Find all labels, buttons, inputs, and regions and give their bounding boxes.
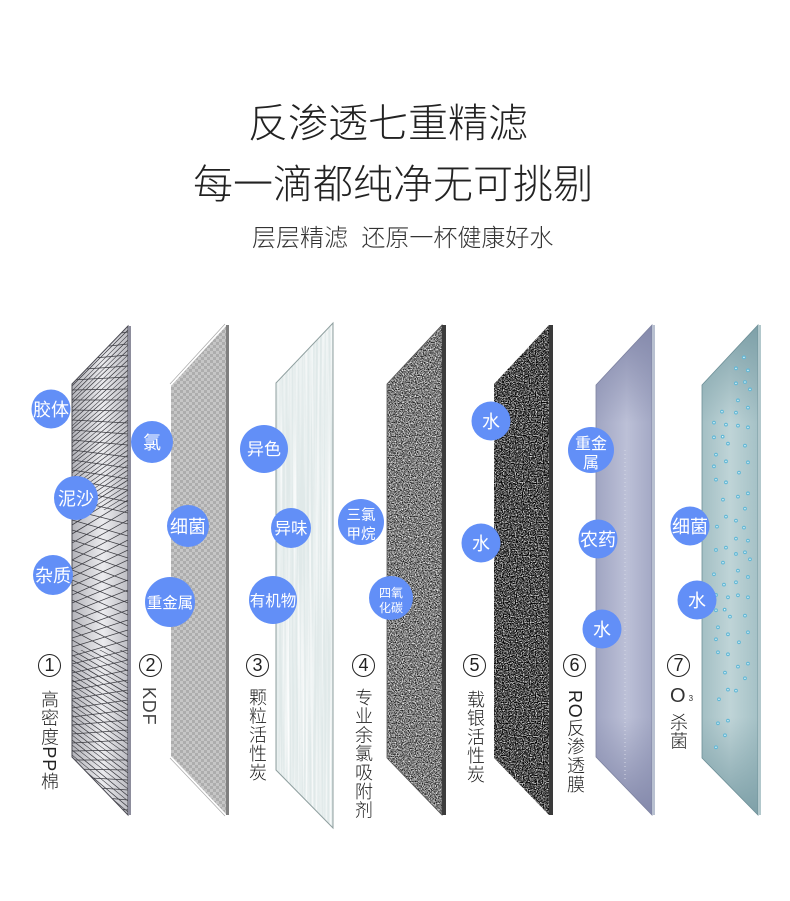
- bubble: 细菌: [167, 505, 209, 547]
- bubble: 重金属: [145, 577, 195, 627]
- label: RO反渗透膜: RO反渗透膜: [565, 690, 585, 794]
- bubble: 杂质: 杂质: [35, 566, 71, 586]
- bubble: 泥沙: [54, 476, 98, 520]
- number 7: 7: [673, 655, 684, 675]
- bubble: 异味: [271, 508, 311, 548]
- bubble: 水 (layer 6): 水: [593, 620, 611, 640]
- bubble: 泥沙: 泥沙: [58, 489, 94, 509]
- number 5: 5: [469, 655, 480, 675]
- label: O3: O 3: [670, 685, 693, 707]
- bubble: 细菌 (layer 7): 细菌: [672, 517, 708, 537]
- bubble: 水 (layer 5 lower): [462, 524, 500, 562]
- number 6: 6: [569, 655, 580, 675]
- bubble: 农药: [578, 520, 618, 558]
- bubble: 重金属 (layer 6): 属: [583, 455, 599, 472]
- number 2: [139, 654, 162, 677]
- filter layers and contaminant bubbles: [32, 322, 761, 830]
- bubble: 异色: 异色: [247, 440, 281, 459]
- bubble: 水 (layer 7): [678, 580, 716, 620]
- bubble: 三氯甲烷: [338, 499, 384, 545]
- bubble: 细菌: 细菌: [170, 517, 206, 537]
- bubble: 水 (layer 5 upper): 水: [482, 412, 500, 432]
- bubble: 胶体: 胶体: [33, 400, 69, 420]
- layer 4: chlorine adsorbent: [387, 325, 446, 815]
- number 1: [38, 654, 61, 677]
- number 6: [563, 654, 586, 677]
- label: 颗粒活性炭: 颗粒活性炭: [247, 688, 267, 782]
- number 7: [667, 654, 690, 677]
- bubble: 重金属: 重金属: [147, 594, 193, 612]
- layer 1: PP cotton mesh: [72, 321, 131, 823]
- label: 载银活性炭: 载银活性炭: [465, 690, 485, 784]
- number 3: 3: [252, 655, 262, 675]
- layer 5: silver-loaded carbon: [494, 325, 553, 815]
- label: 高密度PP棉: 高密度PP棉: [39, 690, 59, 791]
- bubble: 水 (layer 6): [582, 610, 622, 648]
- bubble: 细菌 (layer 7): [670, 506, 710, 546]
- number 3: [246, 654, 269, 677]
- bubble: 异味: 异味: [274, 519, 308, 538]
- bubble: 异色: [240, 425, 288, 473]
- bubble: 四氧化碳: [369, 576, 413, 620]
- layer 2: KDF checker screen: [170, 324, 229, 816]
- number 1: 1: [44, 655, 54, 675]
- bubble: 水 (layer 5 lower): 水: [472, 534, 490, 554]
- bubble: 三氯甲烷: 三氯: [346, 507, 376, 524]
- label: 专业余氯吸附剂: 专业余氯吸附剂: [353, 688, 373, 820]
- layer 3: granular activated carbon: [276, 323, 333, 828]
- bubble: 四氧化碳: 化碳: [379, 601, 403, 615]
- label: 杀菌: 杀菌: [668, 713, 688, 751]
- layer 7: ozone panel with bubbles: [702, 325, 761, 815]
- bubble: 氯: 氯: [143, 433, 161, 453]
- layer 6: RO membrane: [596, 325, 655, 815]
- bubble: 三氯甲烷: 甲烷: [346, 526, 376, 543]
- number 4: 4: [358, 655, 368, 675]
- bubble: 有机物: 有机物: [250, 592, 296, 610]
- bubble: 水 (layer 7): 水: [688, 591, 706, 611]
- title line 2: 每一滴都纯净无可挑剔: [193, 163, 593, 207]
- label: KDF: KDF: [139, 687, 159, 725]
- bubble: 重金属 (layer 6): 重金: [575, 435, 607, 453]
- bubble: 有机物: [249, 576, 297, 624]
- bubble: 杂质: [33, 555, 73, 595]
- number 4: [352, 654, 375, 677]
- bubble: 氯: [131, 421, 173, 463]
- subtitle: 层层精滤 还原一杯健康好水: [252, 225, 553, 252]
- bubble: 胶体: [32, 390, 70, 428]
- number 5: [463, 654, 486, 677]
- title line 1: 反渗透七重精滤: [248, 102, 528, 146]
- number 2: 2: [145, 655, 156, 675]
- bubble: 重金属 (layer 6): [568, 427, 614, 473]
- bubble: 水 (layer 5 upper): [472, 402, 510, 440]
- bubble: 农药: 农药: [580, 530, 616, 550]
- bubble: 四氧化碳: 四氧: [379, 586, 403, 600]
